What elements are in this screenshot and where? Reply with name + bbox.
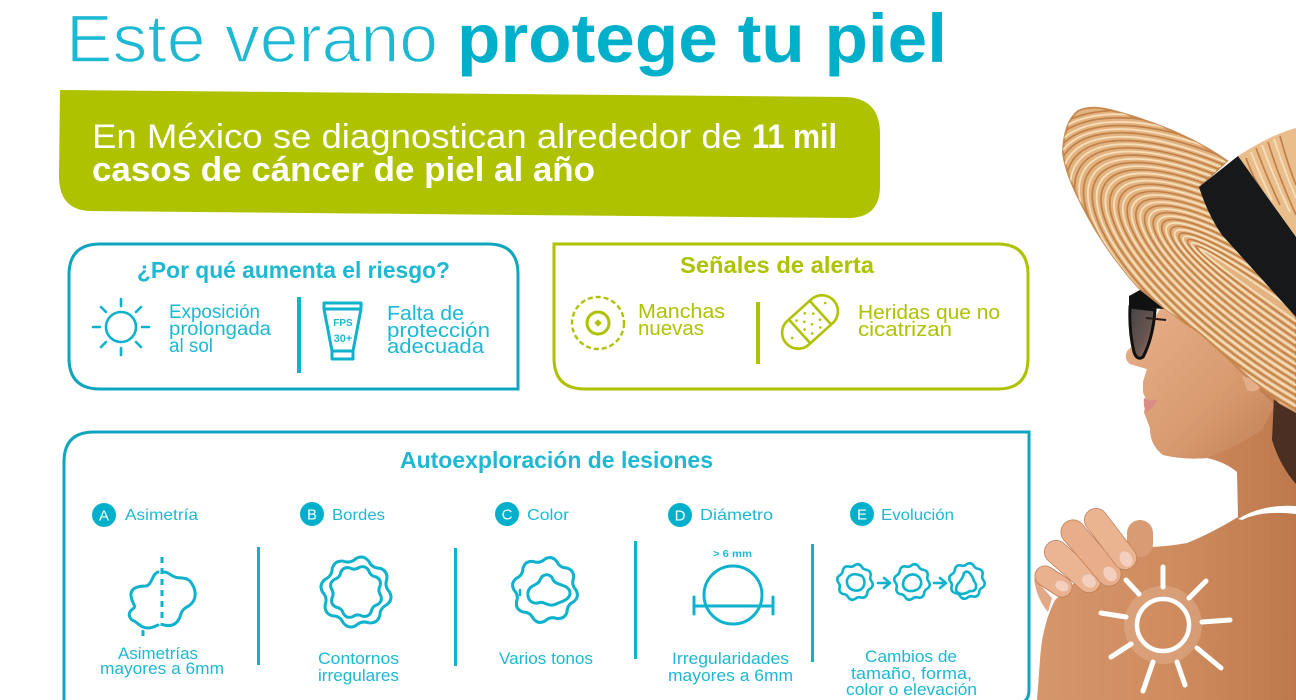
icon: sunscreen tube: [324, 303, 361, 359]
text: manchas nuevas: [638, 301, 725, 340]
fingernails: [1054, 549, 1135, 593]
text: exposición prolongada: Exposición: [169, 302, 260, 323]
sunscreen sun: [1101, 567, 1230, 691]
banner: statistic: 11 mil: [752, 118, 837, 156]
column E: evolución: [837, 502, 985, 699]
column D: diámetro: mayores a 6mm: [668, 666, 793, 685]
column A: asimetría: Asimetrías: [118, 644, 198, 663]
panel: autoexploración de lesiones: [64, 432, 1029, 700]
text: exposición prolongada: [169, 302, 271, 357]
banner: statistic: [59, 90, 880, 218]
icon: sunscreen tube: FPS: [333, 318, 353, 329]
heading: alerta: Señales de alerta: [680, 252, 874, 278]
column E: evolución: color o elevación: [846, 680, 977, 699]
straw hat: [1062, 106, 1296, 413]
icon: spot: [572, 297, 624, 349]
panel: por qué aumenta el riesgo: [69, 244, 518, 389]
face highlight: [1126, 305, 1275, 459]
column A: asimetría: mayores a 6mm: [100, 659, 224, 678]
column B: bordes: Contornos: [318, 649, 399, 668]
text: manchas nuevas: Manchas: [638, 301, 725, 323]
banner: statistic: casos de cáncer de piel al año: [92, 151, 595, 189]
text: heridas: [858, 302, 1000, 341]
panel: señales de alerta: [554, 244, 1028, 389]
icon: asymmetry blob: [129, 557, 195, 636]
skin: face, neck and back: [1037, 305, 1296, 700]
heading: autoexploración: Autoexploración de lesiones: [400, 447, 713, 473]
column A: asimetría: A: [99, 508, 109, 524]
heading: riesgo: ¿Por qué aumenta el riesgo?: [137, 257, 450, 283]
lips: [1144, 398, 1157, 412]
text: falta de protección: [387, 303, 490, 358]
icon: evolution sequence: [837, 563, 985, 600]
icon: sunscreen tube: 30+: [334, 333, 352, 345]
hat crown: [1238, 128, 1296, 237]
column A: asimetría: [92, 503, 224, 678]
column B: bordes: irregulares: [318, 666, 399, 685]
icon: irregular borders: [321, 557, 391, 627]
title: [66, 0, 947, 77]
text: manchas nuevas: nuevas: [638, 318, 704, 340]
column D: diámetro: D: [675, 508, 686, 524]
column D: diámetro: Irregularidades: [672, 649, 789, 668]
title: protege tu piel: [457, 0, 947, 77]
column C: color: Color: [527, 507, 570, 524]
column D: diámetro: [668, 503, 793, 685]
text: heridas: Heridas que no: [858, 302, 1000, 324]
column D: diámetro: > 6 mm: [713, 548, 752, 560]
sunglasses: [1129, 290, 1166, 358]
text: falta de protección: adecuada: [387, 336, 485, 358]
icon: bandage: [776, 289, 844, 355]
column E: evolución: Cambios de: [865, 647, 957, 666]
title: Este verano: [66, 1, 438, 77]
photo: woman with hat and sunscreen sun on shoulder: [1034, 106, 1296, 700]
icon: sun: [93, 299, 149, 355]
icon: varied tones: [513, 558, 577, 622]
column C: color: Varios tonos: [499, 649, 593, 668]
column C: color: C: [502, 506, 513, 524]
bikini strap: [1238, 506, 1296, 520]
column C: color: [495, 502, 593, 668]
column E: evolución: tamaño, forma,: [851, 664, 972, 683]
text: falta de protección: protección: [387, 320, 490, 342]
text: heridas: cicatrizan: [858, 319, 952, 341]
banner: statistic: En México se diagnostican alrededor de: [92, 118, 742, 156]
column A: asimetría: Asimetría: [125, 507, 198, 524]
text: falta de protección: Falta de: [387, 303, 464, 325]
column B: bordes: Bordes: [332, 507, 385, 524]
hand: [1034, 520, 1140, 612]
hat band: [1199, 156, 1296, 317]
text: exposición prolongada: prolongada: [169, 319, 271, 340]
icon: diameter: [694, 566, 773, 624]
column D: diámetro: Diámetro: [700, 507, 773, 524]
column B: bordes: [300, 502, 399, 685]
column E: evolución: Evolución: [881, 507, 954, 524]
hair: [1272, 396, 1296, 484]
column E: evolución: E: [857, 506, 867, 524]
text: exposición prolongada: al sol: [169, 336, 213, 357]
ear: [1242, 376, 1260, 392]
column B: bordes: B: [307, 506, 317, 524]
